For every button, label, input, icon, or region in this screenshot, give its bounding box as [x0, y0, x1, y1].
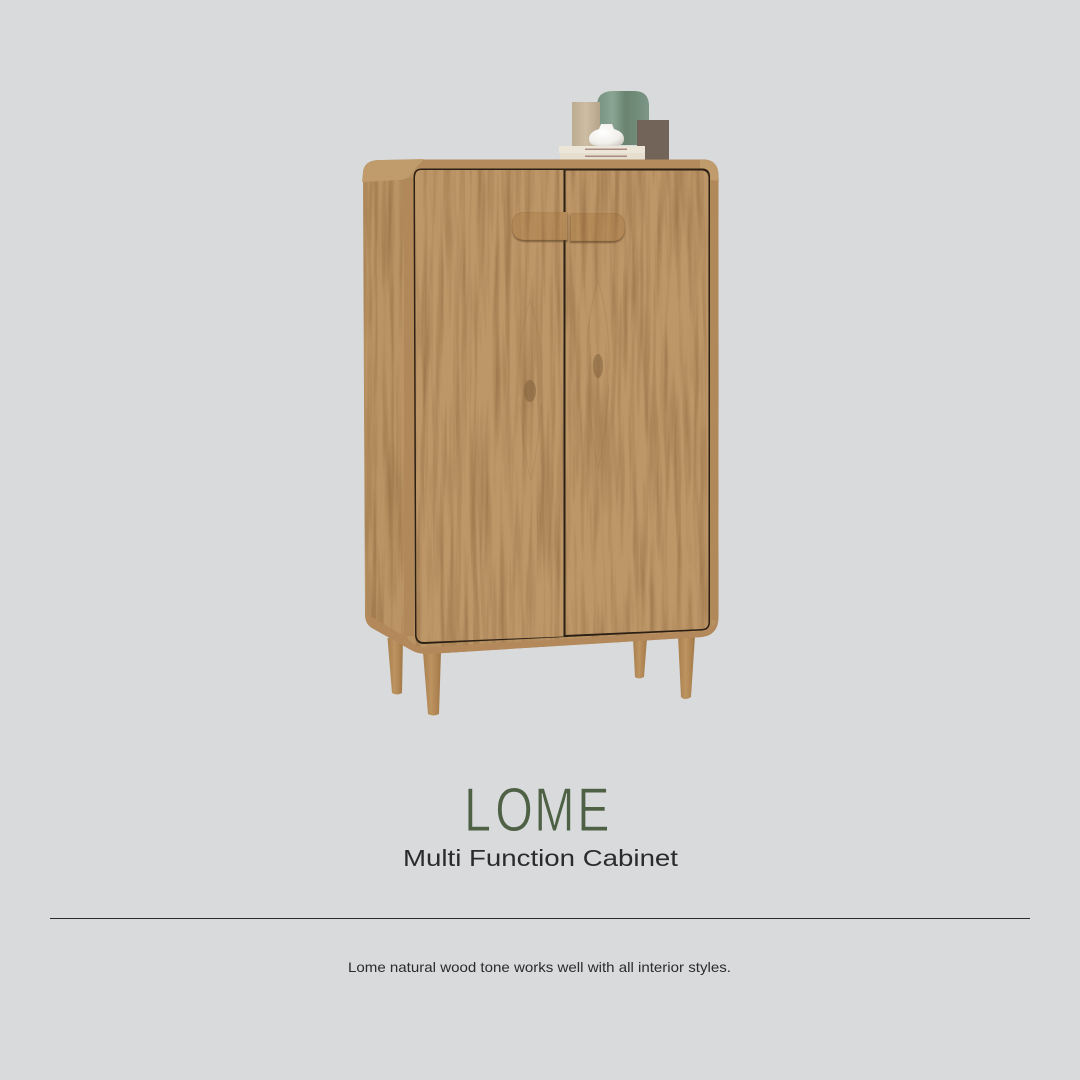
decor objects on top of cabinet	[559, 91, 669, 160]
icon: stacked books	[559, 146, 645, 160]
wood knot left	[519, 300, 542, 480]
divider line	[50, 918, 1030, 919]
cabinet body	[363, 160, 718, 654]
side frame strip left	[404, 178, 414, 636]
door recess outline	[414, 168, 710, 644]
right door	[566, 170, 708, 635]
back left leg	[388, 638, 403, 694]
front right leg	[678, 636, 695, 699]
icon: brown box	[637, 120, 669, 160]
cabinet illustration	[362, 91, 719, 716]
description text: Lome natural wood tone works well with all interior styles.	[348, 959, 731, 975]
back right leg	[633, 638, 647, 678]
front left leg	[423, 652, 441, 716]
top rail	[414, 160, 717, 170]
icon: beige candle	[572, 102, 600, 146]
top left corner block	[362, 159, 424, 182]
top right corner block	[700, 160, 719, 181]
legs	[388, 636, 695, 716]
wood knot right	[587, 280, 609, 470]
icon: white bud vase	[589, 124, 624, 146]
side frame strip right	[710, 180, 718, 620]
left handle	[512, 212, 568, 242]
bottom rail	[365, 613, 718, 654]
right handle	[570, 213, 625, 243]
left door	[415, 170, 564, 642]
icon: green vase	[597, 91, 649, 145]
title: LOME	[464, 775, 609, 844]
subtitle: Multi Function Cabinet	[403, 845, 679, 871]
